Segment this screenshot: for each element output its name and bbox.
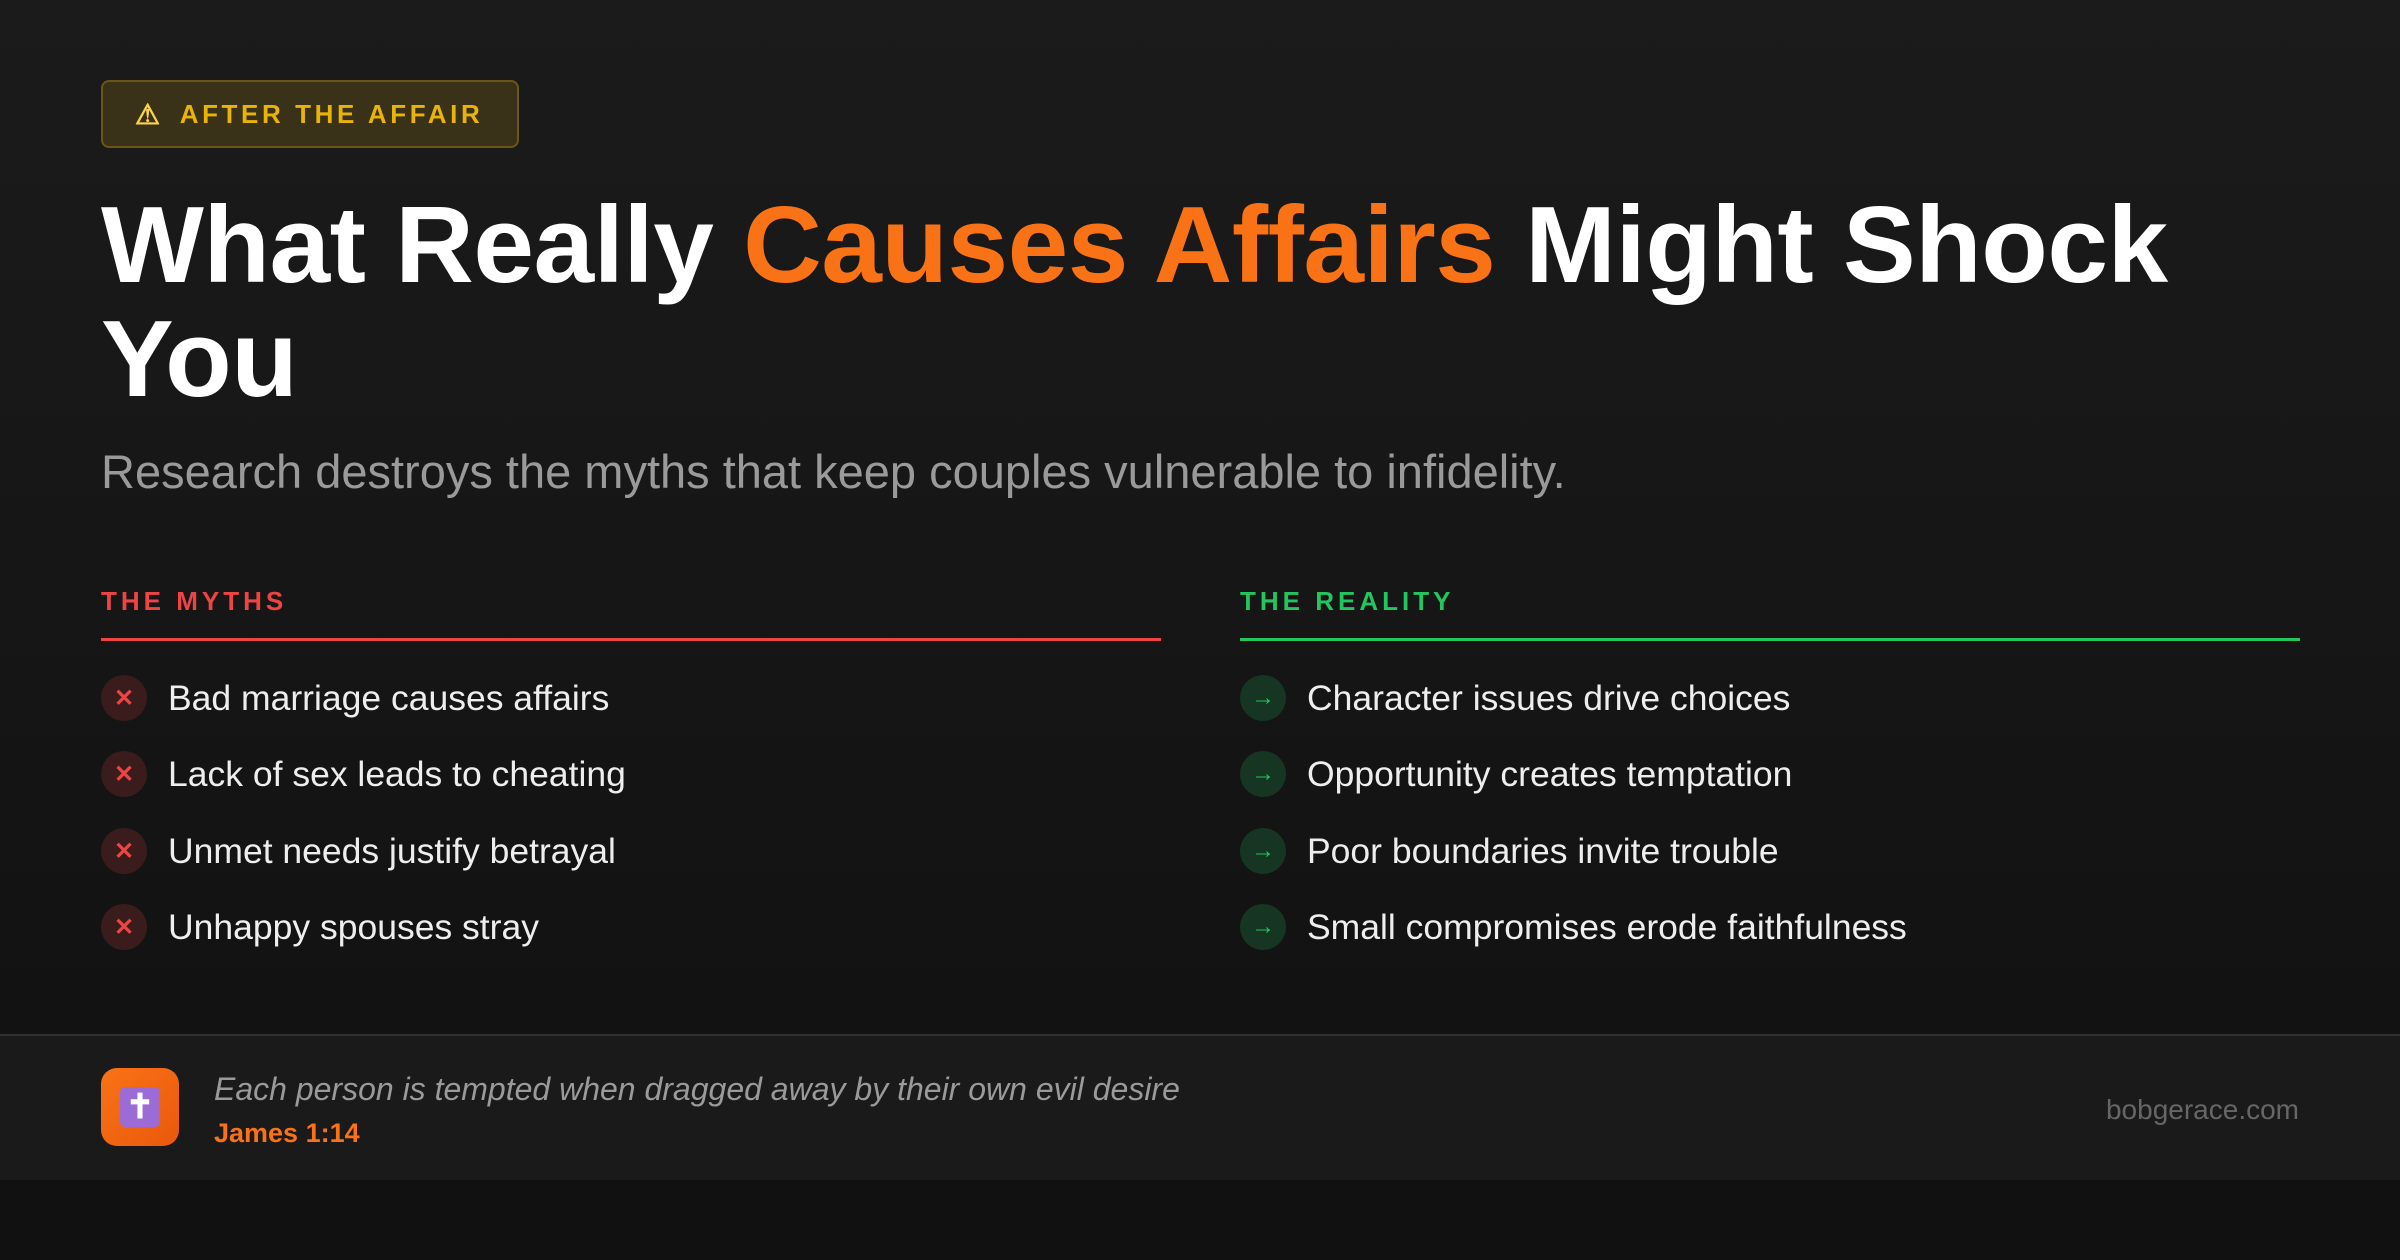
- heading: the reality: THE REALITY: [1240, 586, 1454, 616]
- subtitle: Research destroys the myths that keep couples vulnerable to infidelity.: [101, 445, 1566, 498]
- badge: after the affair: AFTER THE AFFAIR: [180, 98, 483, 128]
- icon: cross: ✝: [126, 1088, 154, 1126]
- myth item 2: ✕: [114, 760, 134, 788]
- reality item 2: →: [1251, 760, 1275, 787]
- icon: cross: [101, 1068, 179, 1146]
- reality item 4: Small compromises erode faithfulness: [1307, 906, 1907, 946]
- title: What Really Causes Affairs Might Shock You: [101, 184, 2168, 420]
- reality item 1: →: [1251, 684, 1275, 711]
- footer: [0, 1034, 2400, 1180]
- reference: James 1:14: [214, 1118, 360, 1148]
- badge: after the affair: [101, 80, 519, 148]
- panel: the reality: [1240, 586, 2300, 950]
- myth item 3: Unmet needs justify betrayal: [168, 830, 616, 870]
- reality item 4: →: [1251, 913, 1275, 940]
- myth item 2: Lack of sex leads to cheating: [168, 754, 626, 794]
- reality item 1: Character issues drive choices: [1307, 678, 1790, 718]
- myth item 3: ✕: [114, 838, 134, 864]
- reality item 3: →: [1251, 837, 1275, 864]
- reality item 2: Opportunity creates temptation: [1307, 754, 1792, 794]
- badge: after the affair: ⚠: [135, 98, 164, 130]
- myth item 4: ✕: [114, 914, 134, 940]
- heading: the myths: THE MYTHS: [101, 586, 287, 616]
- myth item 1: Bad marriage causes affairs: [168, 678, 609, 718]
- myth item 1: ✕: [114, 684, 134, 712]
- website: bobgerace.com: [2106, 1094, 2299, 1125]
- reality item 3: Poor boundaries invite trouble: [1307, 830, 1779, 870]
- heading: the myths: [101, 580, 1161, 641]
- panel: the myths: [101, 586, 1161, 950]
- heading: the reality: [1240, 580, 2300, 641]
- quote: Each person is tempted when dragged away by their own evil desire: [214, 1071, 1180, 1107]
- myth item 4: Unhappy spouses stray: [168, 906, 539, 946]
